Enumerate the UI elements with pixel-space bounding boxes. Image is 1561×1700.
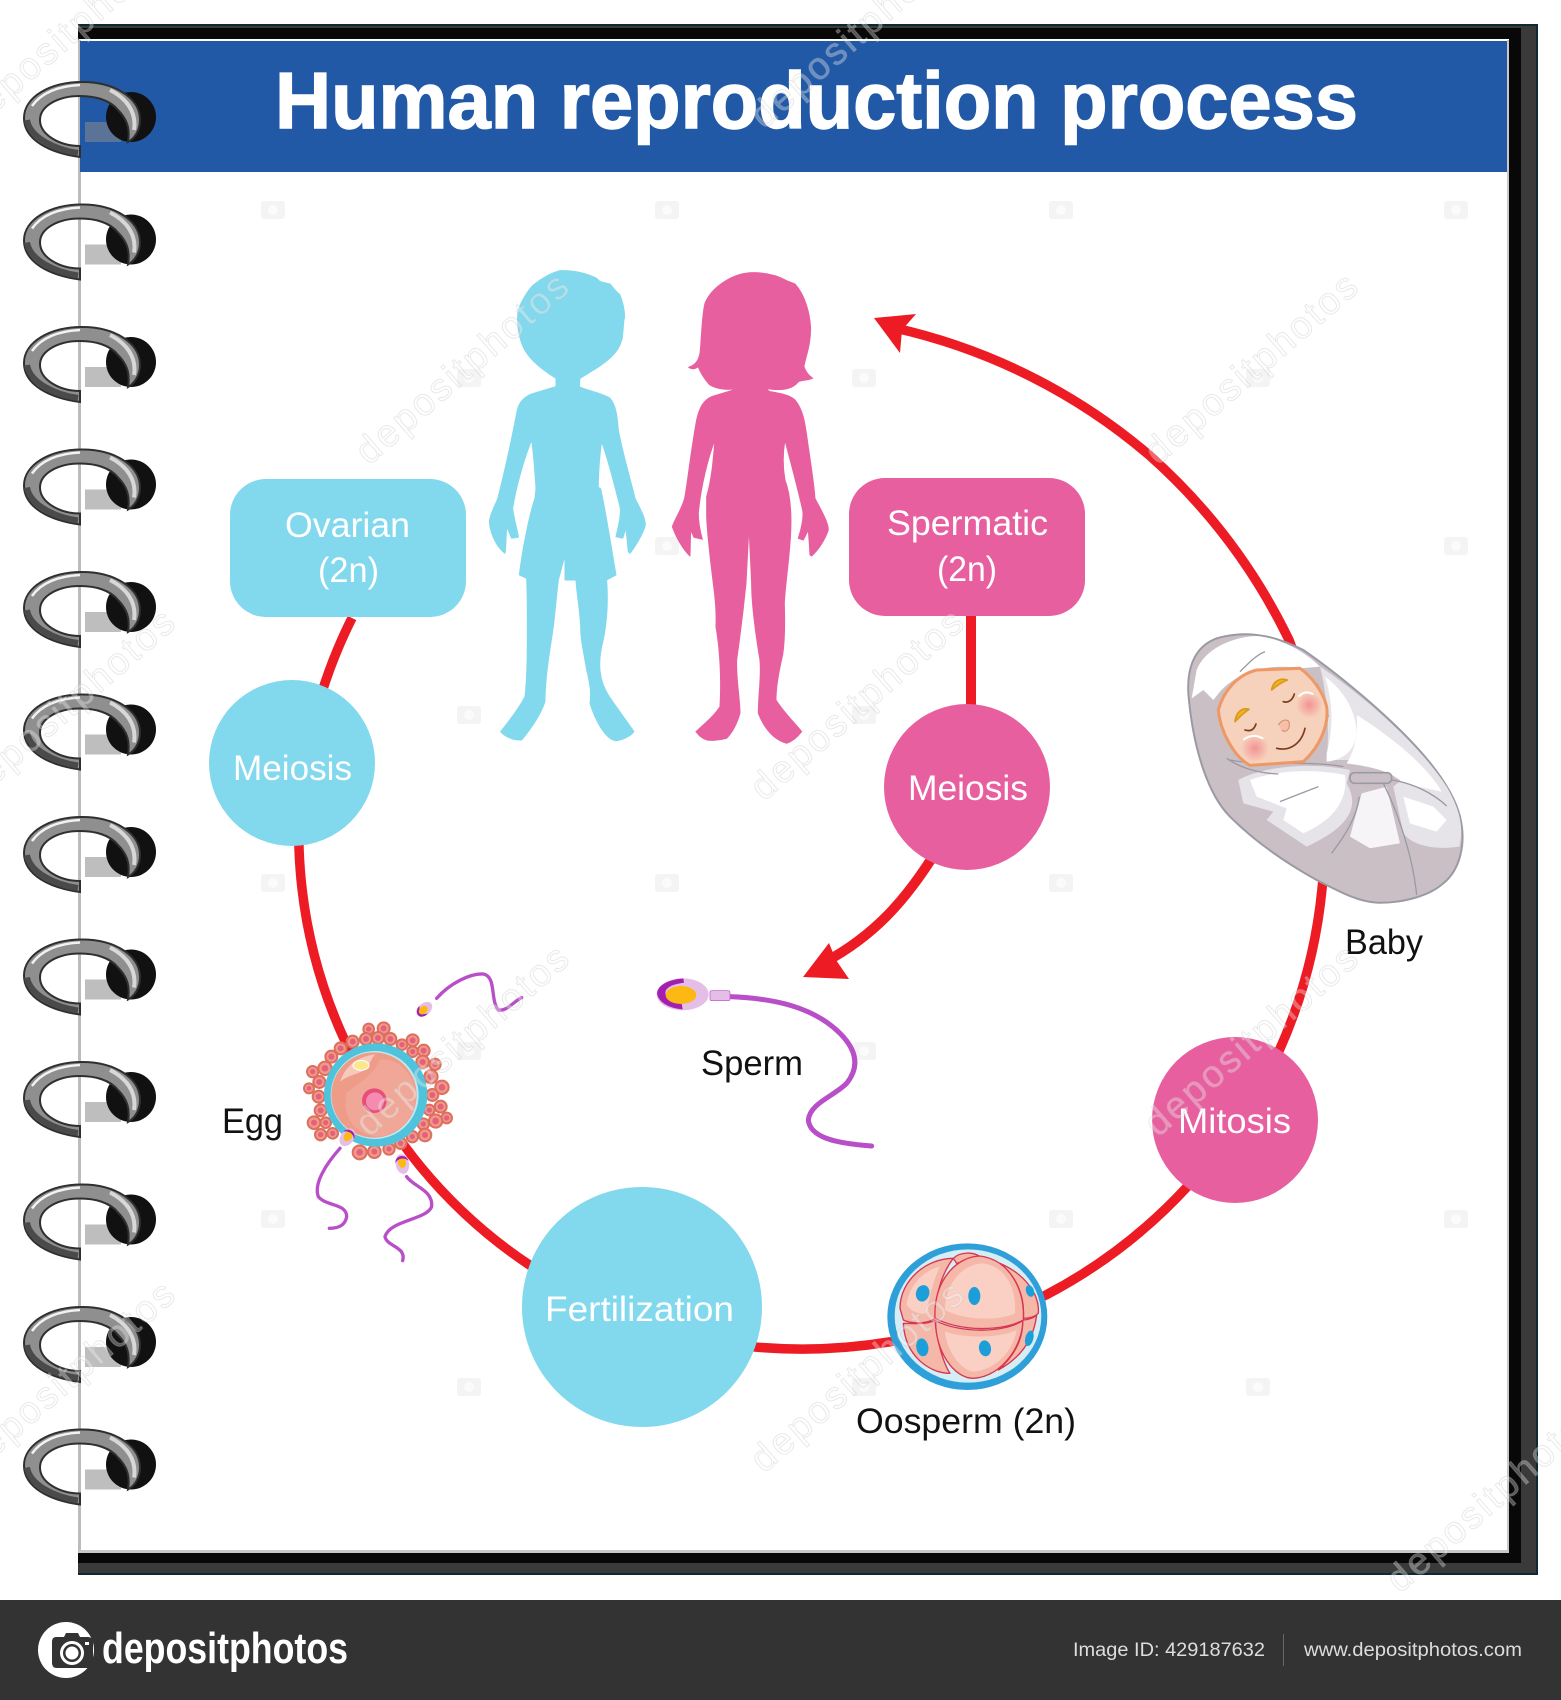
circle: meiosis left: Meiosis — [233, 749, 352, 788]
footer logo — [38, 1622, 348, 1678]
box: spermatic: Spermatic — [887, 504, 1048, 543]
silhouette: girl — [672, 273, 828, 743]
circle: mitosis — [1152, 1037, 1318, 1203]
illustration: egg with sperm — [304, 974, 522, 1261]
silhouette: boy — [489, 271, 645, 741]
circle: meiosis right — [884, 704, 1050, 870]
box: ovarian — [230, 479, 466, 617]
text: depositphotos — [742, 1273, 972, 1481]
text: depositphotos — [347, 937, 577, 1145]
spermatic to meiosis connector — [966, 612, 976, 712]
illustration: sperm — [657, 978, 872, 1146]
footer bar — [0, 1600, 1561, 1700]
spiral binding rings — [24, 82, 156, 1504]
footer image id: Image ID: 429187632 — [1073, 1639, 1265, 1661]
label: oosperm: Oosperm (2n) — [856, 1402, 1076, 1441]
illustration: oosperm — [887, 1243, 1047, 1390]
illustration: baby — [1188, 634, 1463, 903]
box: ovarian: (2n) — [318, 551, 379, 590]
title: Human reproduction process — [275, 56, 1358, 145]
circle: fertilization: Fertilization — [545, 1290, 734, 1329]
label: baby: Baby — [1345, 923, 1423, 962]
footer logo: depositphotos — [102, 1624, 348, 1673]
label: sperm: Sperm — [701, 1044, 803, 1083]
box: spermatic: (2n) — [937, 550, 997, 589]
title banner — [80, 41, 1507, 172]
text: depositphotos — [347, 265, 577, 473]
label: egg: Egg — [222, 1102, 283, 1141]
arrow: meiosis to sperm — [803, 858, 932, 979]
circle: mitosis: Mitosis — [1178, 1102, 1291, 1141]
arrow head: return to parents — [874, 314, 916, 353]
box: spermatic — [849, 478, 1085, 616]
circle: meiosis right: Meiosis — [908, 769, 1028, 808]
circle: fertilization — [522, 1187, 762, 1427]
footer website: www.depositphotos.com — [1303, 1639, 1522, 1661]
red life cycle arc — [299, 328, 1325, 1349]
text: depositphotos — [742, 601, 972, 809]
circle: meiosis left — [209, 680, 375, 846]
box: ovarian: Ovarian — [285, 506, 410, 545]
text: depositphotos — [1136, 265, 1366, 473]
text: depositphotos — [1136, 937, 1366, 1145]
